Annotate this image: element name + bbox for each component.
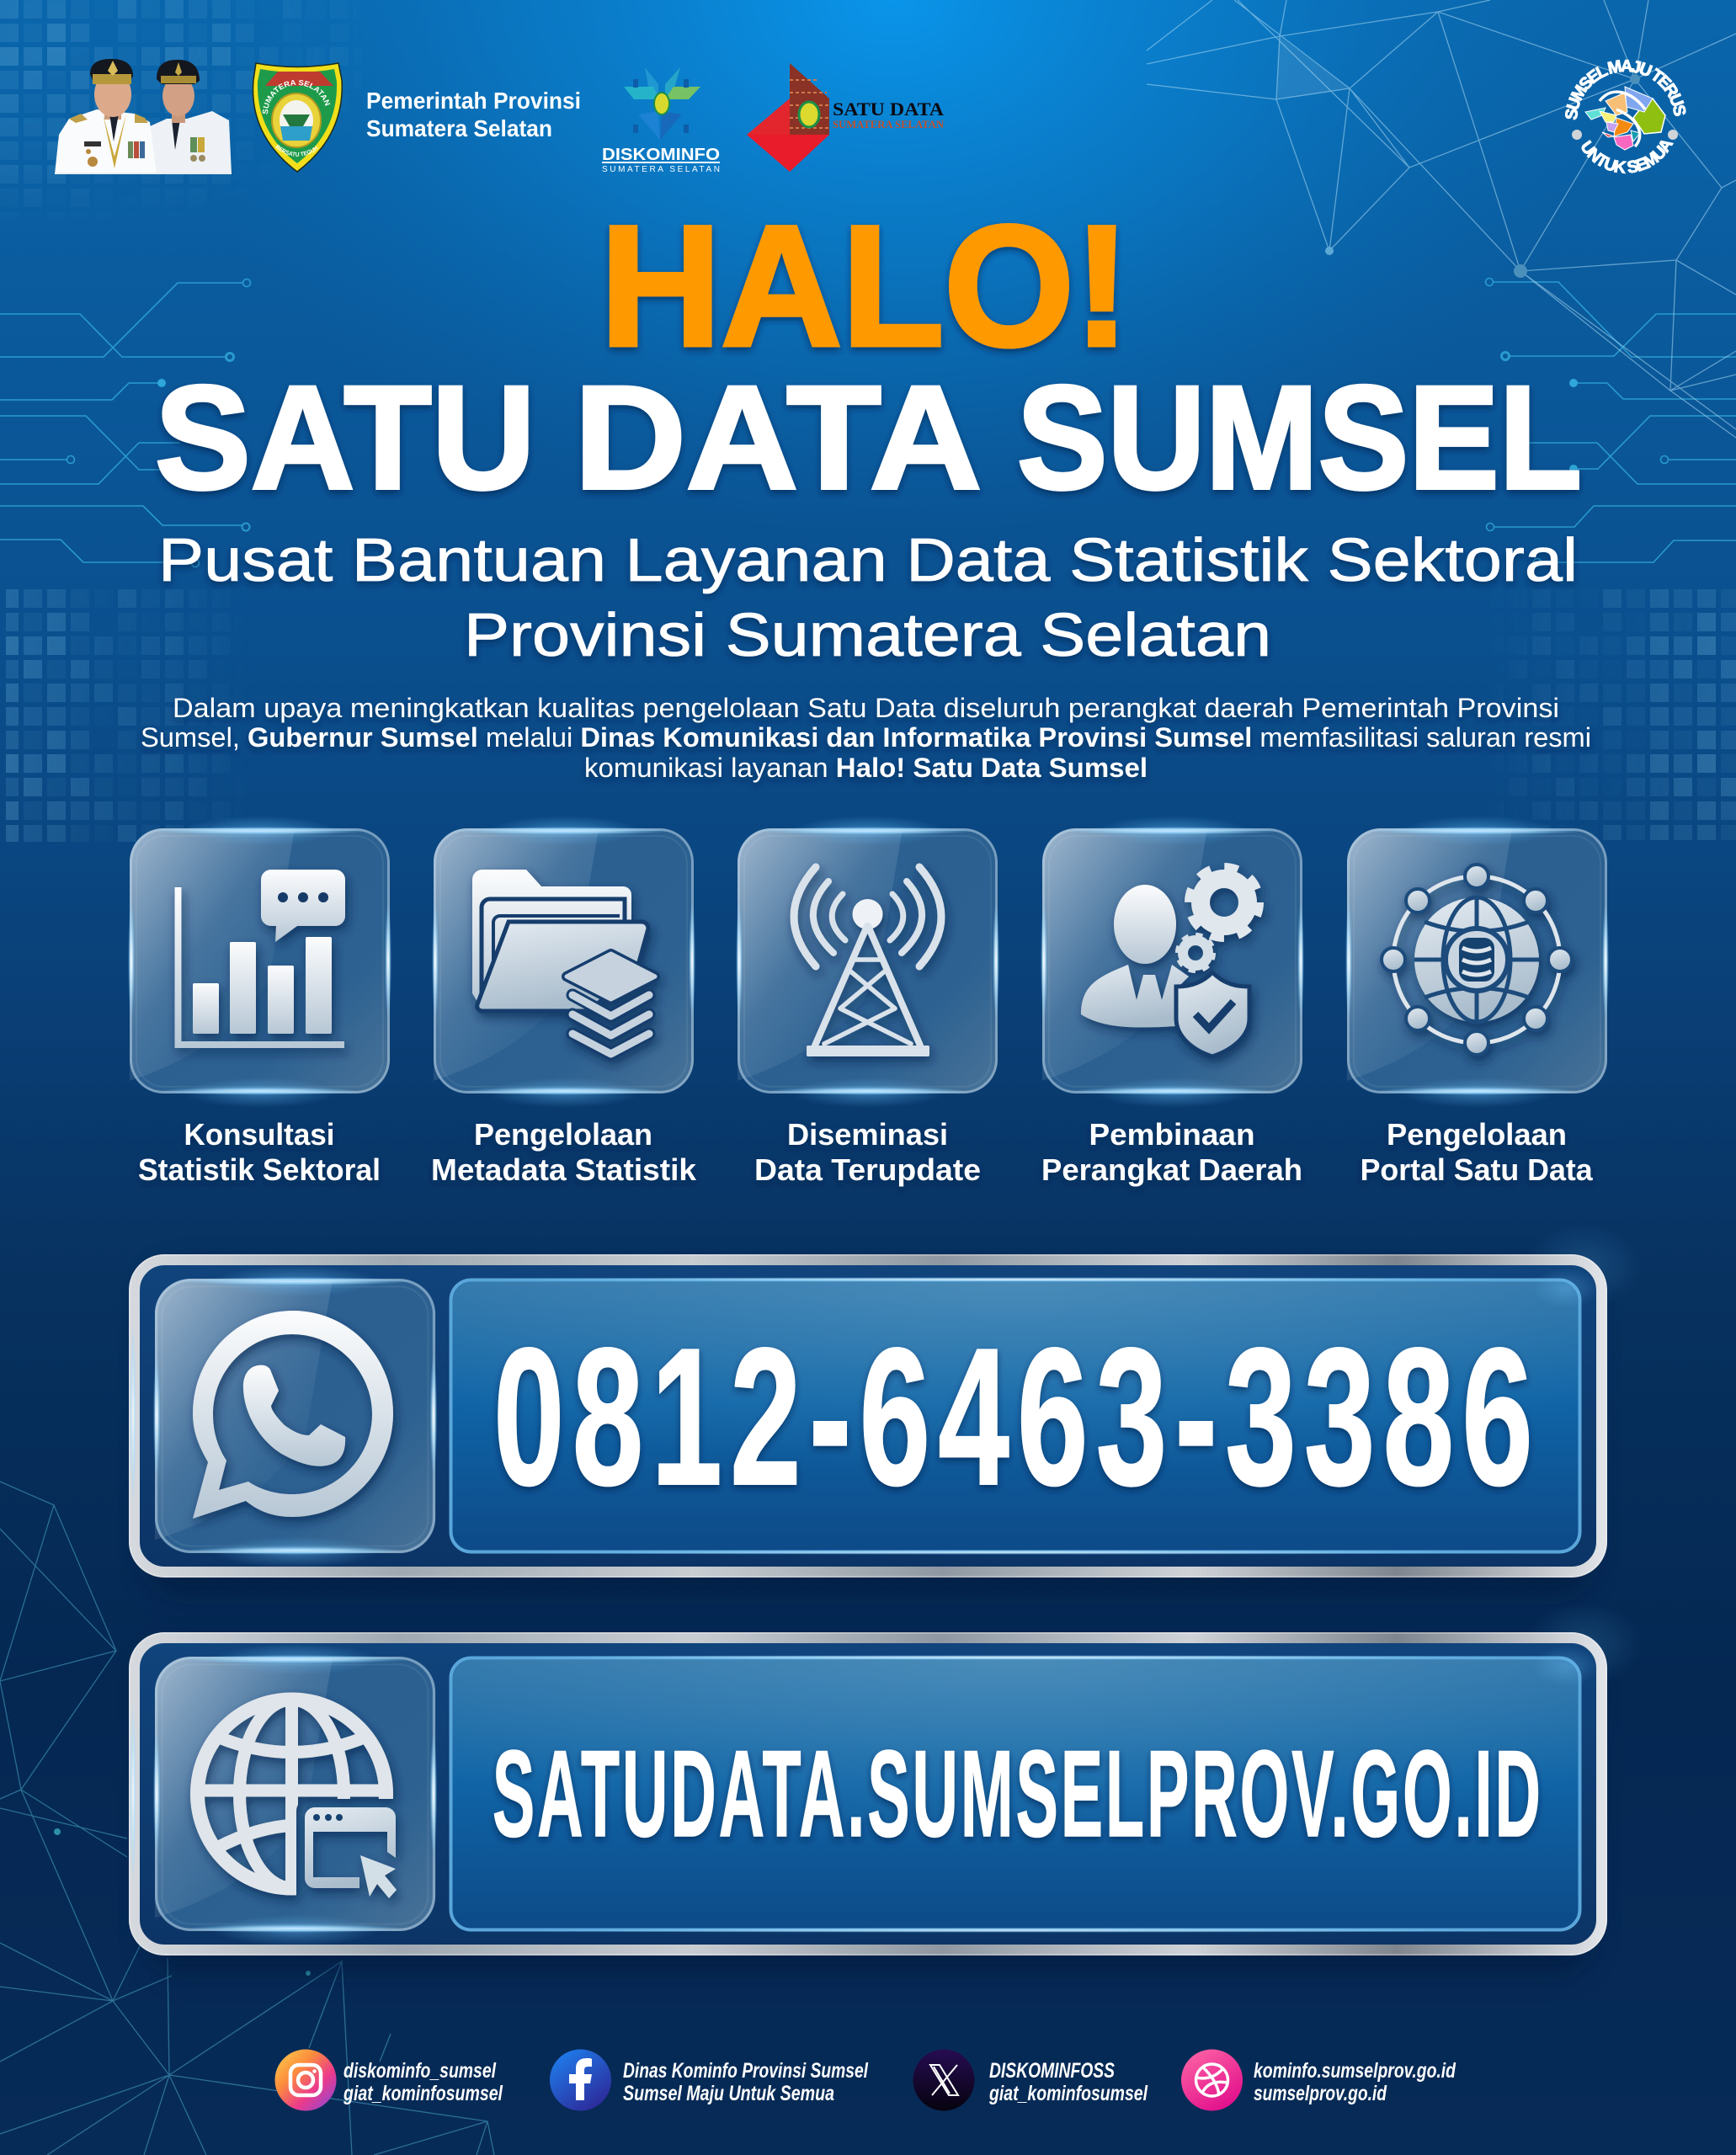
panel: Diseminasi Data Terupdate bbox=[736, 816, 999, 1187]
logo: Sumatera Selatan provincial shield bbox=[253, 62, 343, 173]
icon: X glyph bbox=[930, 2065, 958, 2095]
logo: Satu Data Sumatera Selatan bbox=[747, 63, 945, 172]
icon: WhatsApp bbox=[193, 1311, 393, 1519]
social: Instagram bbox=[274, 2049, 503, 2111]
icon: ball glyph bbox=[1195, 2064, 1227, 2096]
text: provincial government name bbox=[366, 88, 581, 141]
text: provincial government name: Pemerintah Provinsi bbox=[366, 88, 581, 114]
logo: Diskominfo: SUMATERA SELATAN bbox=[602, 165, 720, 174]
label bbox=[1041, 1117, 1302, 1187]
label: Diseminasi bbox=[787, 1117, 948, 1152]
panel: WhatsApp number bbox=[130, 1225, 1642, 1595]
icon: folder and layers bbox=[472, 870, 655, 1054]
panel: Pengelolaan Metadata Statistik bbox=[431, 816, 697, 1187]
title: SATU DATA SUMSEL: SUMSEL bbox=[1017, 356, 1582, 520]
panel: Pembinaan Perangkat Daerah bbox=[1041, 816, 1304, 1187]
social: website: kominfo.sumselprov.go.id bbox=[1254, 2059, 1456, 2083]
text: intro paragraph: Dalam upaya meningkatkan kualitas pengelolaan Satu Data diseluruh perangkat daerah Pemerintah Provinsi bbox=[173, 693, 1559, 723]
social: Facebook: Sumsel Maju Untuk Semua bbox=[623, 2082, 834, 2105]
subtitle: Provinsi Sumatera Selatan bbox=[464, 602, 1271, 669]
logo: Diskominfo bbox=[602, 67, 720, 174]
logo: Sumatera Selatan provincial shield: SUMATERA SELATAN bbox=[263, 80, 330, 114]
label: Pengelolaan bbox=[1387, 1117, 1567, 1152]
logo: Sumatera Selatan provincial shield: BERSATU TEGUH bbox=[275, 145, 318, 157]
label bbox=[138, 1117, 381, 1187]
title: HALO!: HALO! bbox=[600, 190, 1130, 382]
logo: Sumsel Maju Terus Untuk Semua badge: UNTUK SEMUA bbox=[1581, 140, 1674, 173]
icon: person, gears and shield bbox=[1081, 868, 1259, 1056]
logo: Sumsel Maju Terus Untuk Semua badge bbox=[1565, 59, 1686, 173]
label bbox=[754, 1117, 981, 1187]
logo: Sumsel Maju Terus Untuk Semua badge: SUMSEL MAJU TERUS bbox=[1565, 59, 1686, 120]
label bbox=[1361, 1117, 1594, 1187]
logo: Satu Data Sumatera Selatan: SATU DATA bbox=[833, 98, 944, 120]
social: Facebook bbox=[550, 2049, 869, 2111]
label: Data Terupdate bbox=[754, 1152, 981, 1187]
social: Instagram: diskominfo_sumsel bbox=[343, 2059, 497, 2083]
icon: bar chart with speech bubble bbox=[175, 870, 345, 1048]
title: SATU DATA SUMSEL: SATU bbox=[155, 356, 535, 520]
label bbox=[431, 1117, 697, 1187]
label: Pembinaan bbox=[1089, 1117, 1254, 1152]
logo: governor and vice governor portrait bbox=[55, 59, 232, 174]
label: Portal Satu Data bbox=[1361, 1152, 1594, 1187]
label: Statistik Sektoral bbox=[138, 1152, 381, 1187]
social: Instagram: giat_kominfosumsel bbox=[343, 2082, 503, 2105]
panel: Konsultasi Statistik Sektoral bbox=[128, 816, 391, 1187]
icon: Instagram glyph bbox=[290, 2065, 321, 2095]
panel: Pengelolaan Portal Satu Data bbox=[1345, 816, 1609, 1187]
icon: globe with database and orbit bbox=[1382, 865, 1572, 1055]
text: intro paragraph bbox=[141, 693, 1591, 783]
label: Perangkat Daerah bbox=[1041, 1152, 1302, 1187]
subtitle: Pusat Bantuan Layanan Data Statistik Sektoral bbox=[158, 527, 1578, 594]
icon: globe with browser window and cursor bbox=[197, 1700, 397, 1898]
social: website: sumselprov.go.id bbox=[1254, 2082, 1387, 2105]
social: X bbox=[913, 2049, 1148, 2111]
label: Konsultasi bbox=[184, 1117, 335, 1152]
title: SATU DATA SUMSEL bbox=[155, 356, 1582, 520]
social: website bbox=[1181, 2049, 1456, 2111]
label: Metadata Statistik bbox=[431, 1152, 697, 1187]
text: intro paragraph: Sumsel, Gubernur Sumsel melalui Dinas Komunikasi dan Informatika Provinsi Sumsel memfasilitasi saluran resmi bbox=[141, 722, 1591, 753]
title: SATU DATA SUMSEL: DATA bbox=[574, 356, 982, 520]
label: Pengelolaan bbox=[474, 1117, 652, 1152]
social: X: DISKOMINFOSS bbox=[989, 2059, 1115, 2083]
logo: Satu Data Sumatera Selatan: SUMATERA SELATAN bbox=[833, 118, 945, 130]
logo: Diskominfo: DISKOMINFO bbox=[602, 146, 720, 164]
icon: Facebook glyph bbox=[569, 2058, 592, 2100]
subtitle bbox=[158, 527, 1578, 669]
icon: signal tower bbox=[794, 867, 941, 1056]
panel: website address bbox=[130, 1603, 1642, 1973]
social: Facebook: Dinas Kominfo Provinsi Sumsel bbox=[623, 2059, 869, 2083]
social: X: giat_kominfosumsel bbox=[988, 2082, 1148, 2105]
text: intro paragraph: komunikasi layanan Halo! Satu Data Sumsel bbox=[584, 753, 1148, 783]
text: provincial government name: Sumatera Selatan bbox=[366, 115, 552, 141]
